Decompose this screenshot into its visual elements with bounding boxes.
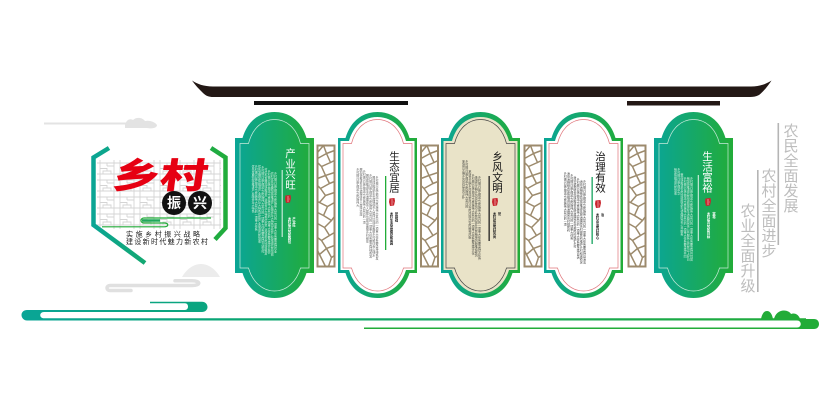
slogan: farmers: 农民全面发展	[782, 123, 798, 213]
body text: 乡村振兴是实现中华民族伟大复兴的一项重大任务	[570, 174, 574, 241]
body text: 裕加快推进农民增收提高生活品质完善公共服务让农民过上好日	[686, 176, 690, 262]
panel: civility	[441, 112, 520, 298]
subtitle: 乡村善治的好核心	[595, 212, 599, 239]
circle badges: 振	[167, 195, 181, 211]
panel: ecology	[338, 112, 417, 298]
subtitle	[389, 211, 398, 246]
slogan: agriculture: 农业全面升级	[738, 203, 756, 293]
body text: 乡村振兴是实现中华民族伟大复兴的一项重大任务要坚持文化	[471, 174, 475, 256]
main ribbon	[22, 310, 806, 320]
panel: prosperity	[654, 112, 733, 298]
body text: 乡村振兴是实现中华	[677, 168, 681, 196]
body text: 展加快推进生态治理改善人居环境建	[359, 167, 363, 217]
subtitle: 治	[600, 212, 604, 217]
body text: 乡村振兴是实现中华民族伟大复兴的一项重大任务	[254, 165, 258, 232]
body text	[356, 167, 379, 261]
body text	[251, 164, 278, 257]
body text	[563, 171, 586, 265]
heading: 产业兴旺	[284, 147, 296, 190]
body text: 乡村振兴是实现中华民族伟大复兴的一项	[362, 170, 366, 225]
heading: 生态宜居	[388, 150, 400, 194]
lattice screen 1	[318, 146, 334, 266]
subtitle	[595, 212, 604, 239]
body text: 治德治相结合加快推进基层治理完善村规民约	[566, 171, 570, 233]
body text: 优先发展加快推进产业融合壮大特色	[251, 164, 255, 214]
body text: 乡村振兴是实现中华民族伟大复兴的一项重大任务要坚持共同	[683, 177, 687, 259]
body text: 乡村振兴是实现中华民族伟大复兴的一项重大任务要坚持农业农	[267, 170, 271, 255]
left bracket	[94, 148, 145, 263]
body text: 乡村振兴是实现中华民族伟大复兴的一项重大任务要坚持文化传	[478, 176, 482, 261]
right end cap	[364, 319, 819, 329]
subtitle: 乡村振兴的新路径	[287, 216, 291, 243]
body text: 乡村振兴是实现中华民族伟大复兴的一项重大任务要坚持共同富	[690, 177, 694, 262]
circle badges: 兴	[193, 195, 207, 211]
body text: 乡村振兴是实现中华民族伟大复兴的一项重大任务要坚持自治	[576, 178, 580, 260]
lattice screen 2	[421, 146, 438, 266]
side slogans	[738, 123, 798, 293]
body text: 裕加快推进农民增收提高生活品质完善公共服务	[680, 172, 684, 237]
slogan: villages	[757, 168, 776, 292]
lattice backdrop	[97, 160, 221, 229]
body text: 承培育文明乡风良好家风淳朴民风提升农民精神风貌推动移风	[474, 175, 478, 258]
cloud: top left	[44, 118, 157, 128]
subtitle	[706, 211, 716, 239]
body text: 承培育文明乡风良好家风淳朴民风提升农民精神风貌	[468, 169, 472, 240]
body text: 村优先发展加快推进产业融合壮大特色优势产业促进农民增收致富	[264, 167, 268, 256]
slogan	[126, 230, 208, 246]
slogan: farmers	[778, 123, 798, 245]
subtitle: 产业旺	[291, 216, 296, 228]
heading: 生活富裕	[701, 150, 713, 194]
body text: 治德治相结合加快推进基层治理完善村规民约维护乡村和谐稳定	[579, 179, 583, 265]
body text: 治德治相结合加快推进基层治理完善村规民约维护乡村	[573, 175, 577, 249]
slogan: 实施乡村振兴战略	[126, 230, 200, 238]
body text: 展加快推进生态治理改善人居环境建设美丽乡村留住	[365, 173, 369, 243]
subtitle	[492, 211, 501, 239]
slogan: 建设新时代魅力新农村	[126, 237, 208, 246]
body text: 展加快推进生态治理改善人居环境建设美丽乡村留住青山绿水	[372, 175, 376, 258]
body text	[462, 159, 482, 261]
body text: 农村优先发展加快推进产业融合壮大特色优势产业促进农民增收	[270, 171, 274, 257]
body text: 优先发展加快推进产业融合壮大特色优势产业促进农民增收	[258, 164, 262, 244]
body text: 乡村振兴是实现中华民族伟大复兴的一项重大任务要坚持自治法	[582, 180, 586, 265]
body text: 裕加快推进农民增收	[674, 167, 678, 196]
main title: 乡村	[110, 156, 211, 196]
cloud: bottom left	[107, 264, 220, 290]
subtitle: 乡村生态宜居的新家园	[389, 211, 393, 246]
body text: 乡村振兴是实现中华民族伟大复兴的	[465, 160, 469, 209]
body text: 乡村振兴是实现中华民族伟大复兴的一项	[563, 172, 567, 227]
roof	[192, 80, 772, 106]
subtitle: 乡村振兴的新目标	[706, 211, 710, 239]
heading: 治理有效	[594, 150, 606, 194]
upper capsule	[150, 302, 208, 312]
shrubs	[761, 310, 800, 319]
subtitle: 是	[497, 211, 501, 216]
lattice screen 3	[524, 146, 542, 266]
emblem: rural revitalization	[94, 148, 226, 263]
right bracket	[211, 148, 226, 240]
subtitle: 富裕	[711, 211, 716, 219]
circle badges	[162, 191, 212, 215]
subtitle	[287, 216, 296, 243]
panel: industry	[235, 112, 314, 298]
heading: 乡风文明	[491, 151, 503, 194]
body text	[674, 167, 694, 262]
subtitle: 乡村建设的好风尚	[492, 211, 496, 239]
body text: 乡村振兴是实现中华民族伟大复兴的一项重大任务要坚持农业	[274, 172, 278, 253]
green swirl	[102, 218, 211, 227]
subtitle: 是基础	[394, 211, 398, 223]
ground ribbon	[22, 302, 819, 329]
slogan: villages: 农村全面进步	[760, 168, 776, 258]
lattice screen 4	[628, 146, 646, 266]
body text: 乡村振兴是实现中华民族伟大复兴的一项重大任务要坚持农业农村	[261, 166, 265, 254]
body text: 乡村振兴是实现中华民族伟大复兴的一项重大任务要坚持绿色发	[375, 176, 379, 261]
body text: 乡村振兴是实现中华民族伟大复兴的一项重大任务要坚持绿色发	[369, 174, 373, 259]
body text: 承培育文明乡风良好家风淳朴	[462, 159, 466, 200]
panel: governance	[544, 112, 623, 298]
body text: 乡村振兴是实现中华民族伟大	[356, 168, 360, 208]
